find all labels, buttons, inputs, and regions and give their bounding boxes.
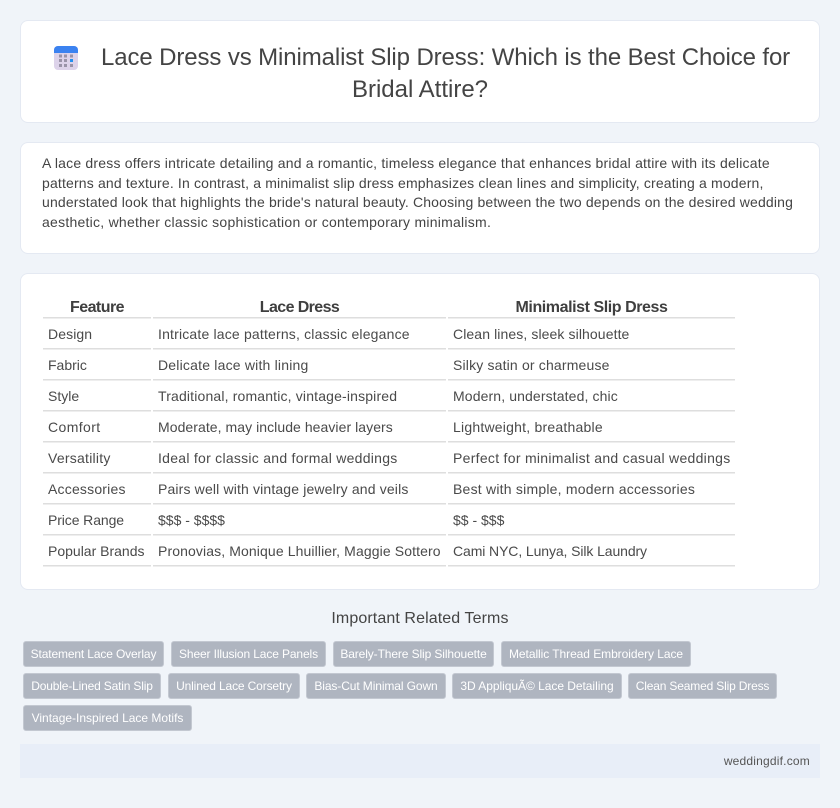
row: design xyxy=(48,326,629,342)
tag: Vintage-Inspired Lace Motifs xyxy=(32,711,183,725)
row: design: Design xyxy=(48,326,92,342)
row: accessories: Pairs well with vintage jewelry and veils xyxy=(158,481,408,497)
text block: introduction: understated look that highlights the bride's natural beauty. Choosing between the two depends on the desired wedding xyxy=(42,194,793,210)
row: popular brands: Cami NYC, Lunya, Silk Laundry xyxy=(453,543,647,559)
text block: introduction: aesthetic, whether classic sophistication or contemporary minimalism. xyxy=(42,214,491,230)
row: price range: $$ - $$$ xyxy=(453,512,504,528)
comparison table xyxy=(43,299,735,567)
text block: introduction: patterns and texture. In contrast, a minimalist slip dress emphasizes clean lines and simplicity, creating a modern, xyxy=(42,175,764,191)
panel: comparison table xyxy=(20,273,820,590)
row: fabric: Delicate lace with lining xyxy=(158,357,309,373)
tag: Barely-There Slip Silhouette xyxy=(340,647,487,661)
tag: Double-Lined Satin Slip xyxy=(31,679,153,693)
text block: introduction: A lace dress offers intricate detailing and a romantic, timeless elegance that enhances bridal attire with its delicate xyxy=(42,155,770,171)
footer xyxy=(20,744,820,778)
tag xyxy=(171,641,326,667)
row: design: Clean lines, sleek silhouette xyxy=(453,326,629,342)
table header row: Lace Dress xyxy=(260,299,339,316)
row: versatility: Ideal for classic and formal weddings xyxy=(158,450,398,466)
row: comfort xyxy=(48,419,603,435)
row: price range xyxy=(48,512,504,528)
tag: Bias-Cut Minimal Gown xyxy=(314,679,438,693)
tag: Unlined Lace Corsetry xyxy=(176,679,292,693)
table header row xyxy=(70,299,668,316)
row: accessories: Accessories xyxy=(48,481,126,497)
panel: introduction xyxy=(20,142,820,254)
row: comfort: Lightweight, breathable xyxy=(453,419,603,435)
row: comfort: Moderate, may include heavier layers xyxy=(158,419,393,435)
row: popular brands xyxy=(48,543,647,559)
text block: introduction xyxy=(42,155,793,230)
row: versatility xyxy=(48,450,731,466)
tag xyxy=(628,673,777,699)
tag xyxy=(306,673,446,699)
row: style xyxy=(48,388,618,404)
row: design: Intricate lace patterns, classic elegance xyxy=(158,326,410,342)
row: popular brands: Popular Brands xyxy=(48,543,145,559)
tag xyxy=(168,673,300,699)
row: comfort: Comfort xyxy=(48,419,101,435)
tag xyxy=(333,641,494,667)
footer text: site name: weddingdif.com xyxy=(724,754,810,768)
panel: header xyxy=(20,20,820,123)
tag: Metallic Thread Embroidery Lace xyxy=(509,647,683,661)
row: price range: Price Range xyxy=(48,512,124,528)
row: style: Traditional, romantic, vintage-inspired xyxy=(158,388,397,404)
tag: Statement Lace Overlay xyxy=(31,647,156,661)
row: style: Modern, understated, chic xyxy=(453,388,618,404)
heading: important related terms: Important Related Terms xyxy=(331,610,509,627)
title xyxy=(101,44,790,103)
row: fabric xyxy=(48,357,610,373)
row: fabric: Fabric xyxy=(48,357,87,373)
tag: 3D AppliquÃ© Lace Detailing xyxy=(460,679,614,693)
row: accessories: Best with simple, modern accessories xyxy=(453,481,695,497)
row: style: Style xyxy=(48,388,79,404)
row: price range: $$$ - $$$$ xyxy=(158,512,225,528)
table header row: Feature xyxy=(70,299,124,316)
title: Bridal Attire? xyxy=(352,76,488,103)
icon: calendar xyxy=(54,46,78,70)
tag xyxy=(501,641,691,667)
row: popular brands: Pronovias, Monique Lhuillier, Maggie Sottero xyxy=(158,543,441,559)
tag xyxy=(452,673,622,699)
table header row: Minimalist Slip Dress xyxy=(516,299,667,316)
row: versatility: Perfect for minimalist and casual weddings xyxy=(453,450,731,466)
tag xyxy=(23,641,164,667)
tag: Sheer Illusion Lace Panels xyxy=(179,647,318,661)
tag xyxy=(23,673,161,699)
row: versatility: Versatility xyxy=(48,450,111,466)
row: accessories xyxy=(48,481,695,497)
title: Lace Dress vs Minimalist Slip Dress: Which is the Best Choice for xyxy=(101,44,790,71)
tag: Clean Seamed Slip Dress xyxy=(636,679,769,693)
row: fabric: Silky satin or charmeuse xyxy=(453,357,610,373)
tag list: related terms xyxy=(23,641,777,731)
tag xyxy=(23,705,192,731)
